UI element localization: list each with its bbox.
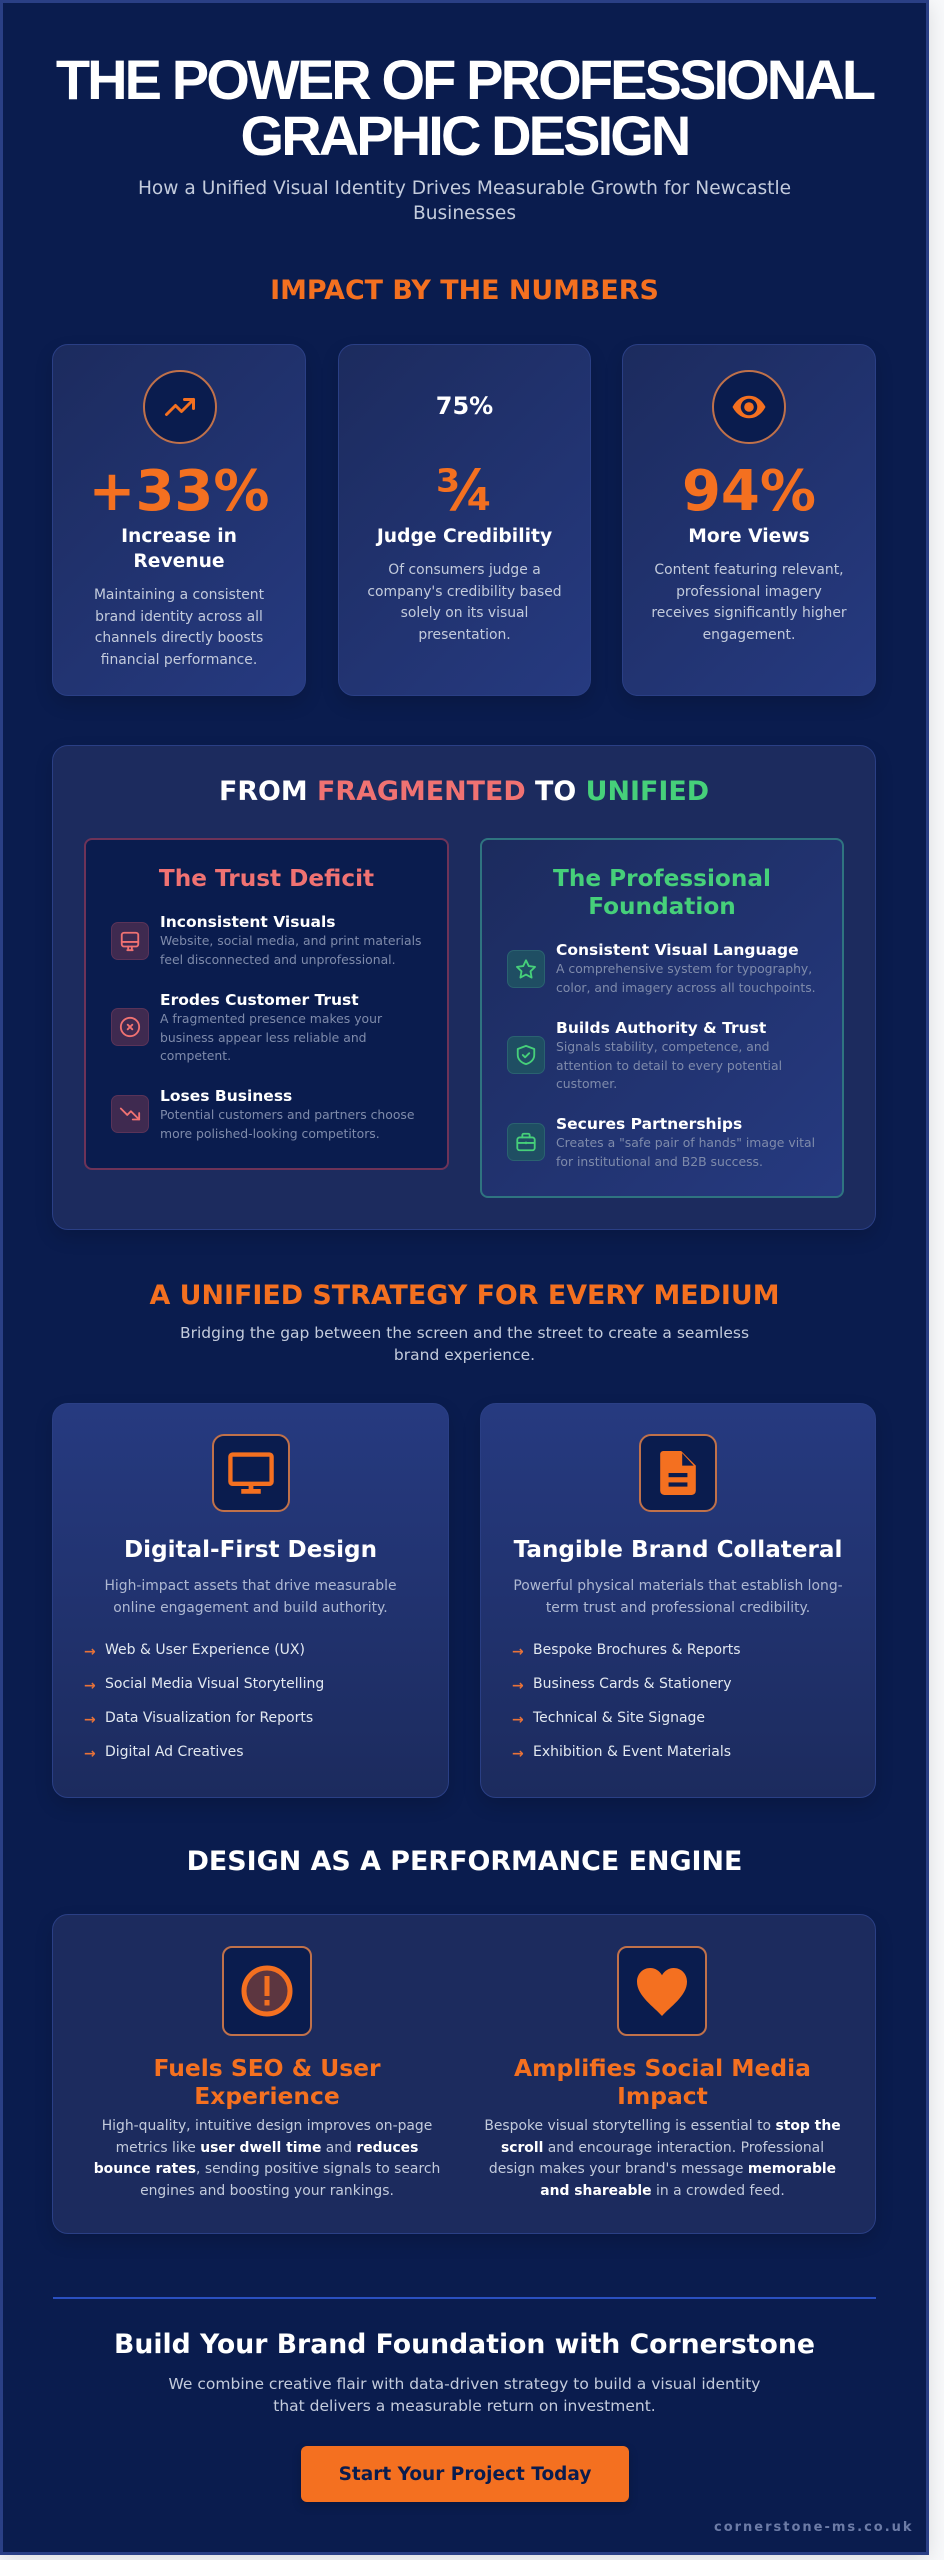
card description bbox=[513, 1578, 843, 1616]
panel: from fragmented to unified bbox=[52, 745, 876, 1230]
list: digital services: Web & User Experience (UX) bbox=[105, 1642, 305, 1658]
item text: business appear less reliable and bbox=[160, 1030, 367, 1045]
column title bbox=[153, 2054, 381, 2110]
list: print services: Technical & Site Signage bbox=[533, 1710, 705, 1726]
heading: FROM FRAGMENTED TO UNIFIED bbox=[219, 776, 709, 807]
icon: shield check bbox=[507, 1036, 545, 1074]
item text: more polished-looking competitors. bbox=[160, 1126, 380, 1141]
item title: Inconsistent Visuals bbox=[160, 913, 336, 931]
item text bbox=[556, 1135, 815, 1169]
item: consistent visual language bbox=[507, 941, 816, 995]
icon: trending up bbox=[143, 370, 217, 444]
divider bbox=[53, 2297, 876, 2299]
subtitle: How a Unified Visual Identity Drives Measurable Growth for Newcastle bbox=[138, 178, 791, 199]
item text: Creates a "safe pair of hands" image vital bbox=[556, 1135, 815, 1150]
icon: star bbox=[507, 950, 545, 988]
stat label: More Views bbox=[688, 526, 810, 547]
stat description: company's credibility based bbox=[367, 584, 562, 600]
stat description: professional imagery bbox=[676, 584, 822, 600]
card description: Powerful physical materials that establish long- bbox=[513, 1578, 843, 1594]
item text: feel disconnected and unprofessional. bbox=[160, 952, 396, 967]
panel: stat card revenue bbox=[52, 344, 306, 696]
item text: Website, social media, and print materials bbox=[160, 933, 421, 948]
item text bbox=[556, 1039, 782, 1091]
stat description: presentation. bbox=[418, 627, 511, 643]
column: social bbox=[484, 1946, 841, 2199]
list: print services: → bbox=[512, 1678, 524, 1694]
CTA text: We combine creative flair with data-driven strategy to build a visual identity bbox=[169, 2375, 760, 2393]
icon: trending down bbox=[111, 1095, 149, 1133]
icon: eye bbox=[712, 370, 786, 444]
panel heading: The Professional bbox=[553, 865, 771, 892]
card title: Digital-First Design bbox=[124, 1537, 377, 1563]
list: print services: → bbox=[512, 1644, 524, 1660]
list: digital services: Social Media Visual Storytelling bbox=[105, 1676, 324, 1692]
item: inconsistent visuals bbox=[111, 913, 421, 967]
icon: monitor bbox=[212, 1434, 290, 1512]
icon: circle x bbox=[111, 1008, 149, 1046]
card title: Tangible Brand Collateral bbox=[514, 1537, 842, 1563]
CTA text bbox=[169, 2375, 760, 2415]
list: print services: → bbox=[512, 1746, 524, 1762]
list: digital services bbox=[84, 1642, 324, 1762]
icon: heart bbox=[617, 1946, 707, 2036]
card description: term trust and professional credibility. bbox=[546, 1600, 810, 1616]
column text: metrics like user dwell time and reduces bbox=[116, 2140, 418, 2156]
item text: competent. bbox=[160, 1048, 231, 1063]
list: print services: Bespoke Brochures & Reports bbox=[533, 1642, 741, 1658]
list: digital services: Data Visualization for Reports bbox=[105, 1710, 313, 1726]
column text: scroll and encourage interaction. Professional bbox=[501, 2140, 824, 2156]
CTA button bbox=[301, 2446, 629, 2502]
item text: Signals stability, competence, and bbox=[556, 1039, 770, 1054]
stat description: Maintaining a consistent bbox=[94, 587, 264, 603]
stat description: Content featuring relevant, bbox=[654, 562, 844, 578]
panel: stat card credibility bbox=[338, 344, 591, 696]
column text: and shareable in a crowded feed. bbox=[540, 2183, 785, 2199]
item text bbox=[556, 961, 816, 995]
heading: a unified strategy: A UNIFIED STRATEGY FOR EVERY MEDIUM bbox=[149, 1280, 780, 1311]
list: digital services: → bbox=[84, 1678, 96, 1694]
item text bbox=[160, 933, 421, 967]
stat description: brand identity across all bbox=[95, 609, 263, 625]
list: print services bbox=[512, 1642, 741, 1762]
panel: stat card views bbox=[622, 344, 876, 696]
panel heading: Foundation bbox=[588, 893, 736, 920]
column title bbox=[514, 2054, 811, 2110]
card description: online engagement and build authority. bbox=[113, 1600, 388, 1616]
stat description: channels directly boosts bbox=[95, 630, 263, 646]
column text: Bespoke visual storytelling is essential to stop the bbox=[484, 2118, 841, 2134]
column title: Fuels SEO & User bbox=[153, 2054, 381, 2082]
stat label: Revenue bbox=[133, 551, 225, 572]
item text bbox=[160, 1107, 414, 1141]
title: GRAPHIC DESIGN bbox=[241, 104, 688, 167]
item text: for institutional and B2B success. bbox=[556, 1154, 763, 1169]
subtitle: Businesses bbox=[413, 203, 516, 224]
item text: attention to detail to every potential bbox=[556, 1058, 782, 1073]
stat caption 75%: 75% bbox=[436, 392, 493, 420]
stat description: solely on its visual bbox=[401, 605, 528, 621]
item title: Erodes Customer Trust bbox=[160, 991, 359, 1009]
column title: Experience bbox=[194, 2082, 340, 2110]
icon: briefcase bbox=[507, 1123, 545, 1161]
card description bbox=[104, 1578, 397, 1616]
card description: High-impact assets that drive measurable bbox=[104, 1578, 397, 1594]
section description: Bridging the gap between the screen and the street to create a seamless bbox=[180, 1324, 749, 1342]
stat description: Of consumers judge a bbox=[388, 562, 541, 578]
item text: A fragmented presence makes your bbox=[160, 1011, 382, 1026]
column text bbox=[94, 2118, 440, 2199]
item text: Potential customers and partners choose bbox=[160, 1107, 414, 1122]
column title: Amplifies Social Media bbox=[514, 2054, 811, 2082]
panel: the trust deficit bbox=[84, 838, 449, 1170]
column title: Impact bbox=[617, 2082, 708, 2110]
stat number: 94% bbox=[682, 459, 816, 524]
title: THE POWER OF PROFESSIONAL bbox=[56, 48, 873, 111]
list: print services: → bbox=[512, 1712, 524, 1728]
item: builds authority and trust bbox=[507, 1019, 782, 1091]
list: digital services: → bbox=[84, 1712, 96, 1728]
list: print services: Exhibition & Event Materials bbox=[533, 1744, 731, 1760]
icon: document bbox=[639, 1434, 717, 1512]
panel: tangible brand collateral bbox=[480, 1403, 876, 1798]
stat label bbox=[121, 526, 237, 572]
stat description bbox=[651, 562, 847, 643]
stat description: financial performance. bbox=[101, 652, 257, 668]
stat number: ¾ bbox=[436, 459, 493, 524]
stat description: receives significantly higher bbox=[651, 605, 847, 621]
panel: performance engine bbox=[52, 1914, 876, 2234]
item title: Secures Partnerships bbox=[556, 1115, 742, 1133]
CTA button: Start Your Project Today bbox=[339, 2464, 591, 2485]
icon: monitor bbox=[111, 922, 149, 960]
list: digital services: → bbox=[84, 1644, 96, 1660]
panel: digital-first design bbox=[52, 1403, 449, 1798]
footer url: cornerstone-ms.co.uk bbox=[714, 2520, 914, 2535]
item title: Builds Authority & Trust bbox=[556, 1019, 766, 1037]
stat label: Judge Credibility bbox=[377, 526, 552, 547]
list: print services: Business Cards & Stationery bbox=[533, 1676, 731, 1692]
stat description: engagement. bbox=[703, 627, 795, 643]
column text bbox=[484, 2118, 841, 2199]
stat number: +33% bbox=[89, 459, 269, 524]
icon: alert circle bbox=[222, 1946, 312, 2036]
CTA heading: Build Your Brand Foundation with Cornerstone bbox=[114, 2329, 815, 2360]
column text: High-quality, intuitive design improves on-page bbox=[102, 2118, 432, 2134]
column text: engines and boosting your rankings. bbox=[140, 2183, 394, 2199]
column text: bounce rates, sending positive signals to search bbox=[94, 2161, 440, 2177]
panel heading: The Trust Deficit bbox=[159, 865, 374, 892]
CTA text: that delivers a measurable return on investment. bbox=[273, 2397, 656, 2415]
column text: design makes your brand's message memorable bbox=[489, 2161, 836, 2177]
item: loses business bbox=[111, 1087, 414, 1141]
item title: Consistent Visual Language bbox=[556, 941, 799, 959]
item text: color, and imagery across all touchpoints. bbox=[556, 980, 816, 995]
list: digital services: → bbox=[84, 1746, 96, 1762]
subtitle bbox=[138, 178, 791, 224]
item: erodes customer trust bbox=[111, 991, 382, 1063]
stat description bbox=[94, 587, 264, 668]
section description: brand experience. bbox=[394, 1346, 535, 1364]
panel heading bbox=[553, 865, 771, 920]
item text bbox=[160, 1011, 382, 1063]
item text: customer. bbox=[556, 1076, 617, 1091]
list: digital services: Digital Ad Creatives bbox=[105, 1744, 244, 1760]
stat label: Increase in bbox=[121, 526, 237, 547]
title bbox=[56, 48, 874, 167]
stat description bbox=[367, 562, 562, 643]
panel: the professional foundation bbox=[480, 838, 844, 1198]
item: secures partnerships bbox=[507, 1115, 815, 1169]
item title: Loses Business bbox=[160, 1087, 292, 1105]
column: SEO bbox=[94, 1946, 440, 2199]
heading: impact by the numbers: IMPACT BY THE NUMBERS bbox=[270, 275, 659, 306]
heading: design as a performance engine: DESIGN AS A PERFORMANCE ENGINE bbox=[187, 1846, 742, 1877]
item text: A comprehensive system for typography, bbox=[556, 961, 812, 976]
section description bbox=[180, 1324, 749, 1364]
